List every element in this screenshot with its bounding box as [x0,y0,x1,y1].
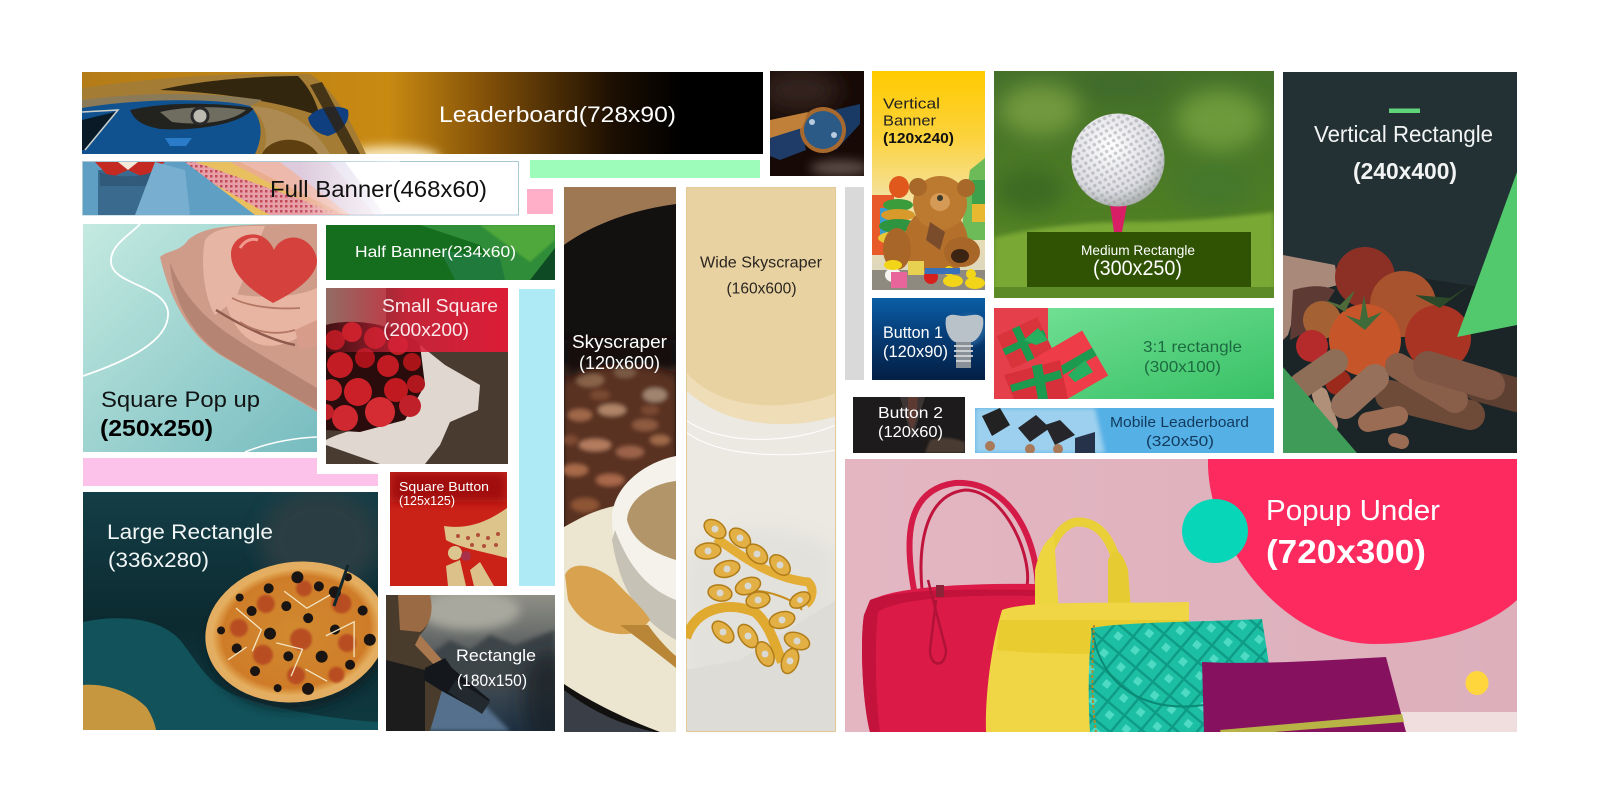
image: red roses [318,322,425,432]
label: vertical rectangle: (240x400) [1353,158,1457,184]
label: button 1 [883,324,948,361]
label: button 1: Button 1 [883,324,943,342]
label: mobile leaderboard: Mobile Leaderboard [1110,414,1249,431]
panel: 3:1 rectangle [994,308,1274,399]
label: square button: (125x125) [399,493,455,508]
label: rectangle: (180x150) [457,671,527,690]
label: large rectangle [107,521,273,572]
label: vertical banner: Banner [883,114,936,130]
label: vertical banner: Vertical [883,96,940,112]
panel: rectangle [386,595,555,731]
panel: medium rectangle [994,71,1274,298]
image: hands holding heart [160,224,317,412]
label: button 2 [878,405,943,441]
label: medium rectangle [1027,232,1251,287]
label: skyscraper: (120x600) [579,353,660,373]
image: toys and teddy bear [872,158,985,290]
image: yellow handbag [986,522,1189,732]
shape: teal circle [1182,499,1248,563]
image: gold spoon [565,566,676,668]
decoration: white curve [83,224,168,376]
label: skyscraper: Skyscraper [572,332,667,352]
panel: half banner [326,225,555,280]
shape: outer tan circle [686,187,836,424]
placeholder: grey bar [845,187,864,380]
label: leaderboard: Leaderboard(728x90) [439,102,676,127]
label: 3:1 rectangle [1143,339,1242,376]
panel: button 1 [872,298,985,380]
image: watch [770,71,864,176]
placeholder: pink square [527,189,553,214]
label: 3:1 rectangle: 3:1 rectangle [1143,339,1242,356]
image: white wrapping paper [326,345,480,464]
label: medium rectangle: Medium Rectangle [1081,243,1195,258]
panel: popup under [845,459,1517,732]
image: purple clutch [1202,657,1406,736]
label: popup under: (720x300) [1266,533,1426,570]
panel: large rectangle [83,492,378,730]
shape: green triangle [1457,172,1517,337]
label: vertical banner: (120x240) [883,131,954,147]
label: wide skyscraper: (160x600) [726,280,796,298]
panel: vertical banner [872,71,985,290]
shape: lower-left green triangle [1283,367,1357,453]
label: small square [382,296,498,340]
panel: leaderboard [82,72,763,154]
label: mobile leaderboard: (320x50) [1146,433,1214,450]
label: vertical rectangle: Vertical Rectangle [1314,121,1493,147]
label: medium rectangle: (300x250) [1093,257,1182,280]
accent: green dash [1389,108,1420,113]
image: teal quilted bag [1089,619,1273,732]
label: wide skyscraper: Wide Skyscraper [700,254,822,272]
image: tomatoes in hands [1283,247,1517,453]
panel: button 2 [853,397,965,453]
label: small square: (200x200) [383,320,469,340]
label: wide skyscraper [700,254,822,298]
image: gift boxes [997,317,1108,400]
shape: teal blob [83,618,378,730]
shape: yellow dot [1466,671,1488,695]
panel: skyscraper [564,187,676,732]
shape: crimson circle [1208,459,1517,644]
image: golf tee [1110,205,1127,232]
icon: dental implant [946,315,983,368]
image: saucer [564,500,676,732]
label: 3:1 rectangle: (300x100) [1144,359,1221,376]
label: square pop up: (250x250) [100,415,213,441]
shape: tan blob [83,685,156,730]
image: gold jewellery [444,508,507,586]
label: rectangle [456,646,536,690]
label: rectangle: Rectangle [456,646,536,665]
label: half banner: Half Banner(234x60) [355,244,516,261]
image: coffee beans [562,365,676,540]
label: square button: Square Button [399,479,489,494]
image: coffee cup [612,456,676,640]
image: golf ball [1072,114,1164,206]
panel: full banner [82,161,519,216]
image: red heart [231,234,317,303]
image: car [82,74,366,154]
shape: inner tan circle [686,187,836,405]
panel: wide skyscraper [686,187,836,732]
placeholder: green bar [530,160,760,178]
panel: square button [390,472,507,586]
label: mobile leaderboard [1110,414,1249,450]
label: vertical banner [883,96,954,147]
image: photographer with camera [386,595,490,731]
label: button 2: (120x60) [878,424,943,441]
label: popup under: Popup Under [1266,495,1440,527]
label: large rectangle: (336x280) [108,549,209,572]
label: vertical rectangle [1314,121,1493,184]
panel: vertical rectangle [1283,72,1517,453]
shape: brown top [564,187,676,245]
label: square pop up [100,387,260,441]
label: square pop up: Square Pop up [101,387,260,412]
panel: square pop up [83,224,317,452]
label: full banner: Full Banner(468x60) [270,176,487,202]
image: graduation caps [975,408,1105,454]
panel: small square [326,288,508,464]
label: button 2: Button 2 [878,405,943,422]
image: gold leaf ring [686,516,813,676]
label: large rectangle: Large Rectangle [107,521,273,544]
label: button 1: (120x90) [883,343,948,361]
label: square button [399,479,489,508]
label: skyscraper [572,332,667,373]
placeholder: pink bar [83,458,378,486]
image: red handbag [862,483,1040,732]
label: popup under [1266,495,1440,570]
panel: mobile leaderboard [975,408,1274,453]
image: pizza [196,550,397,722]
image: denim shirts [83,162,400,215]
shape: red corner [994,308,1048,399]
label: small square: Small Square [382,296,498,316]
placeholder: light blue bar [519,289,555,586]
